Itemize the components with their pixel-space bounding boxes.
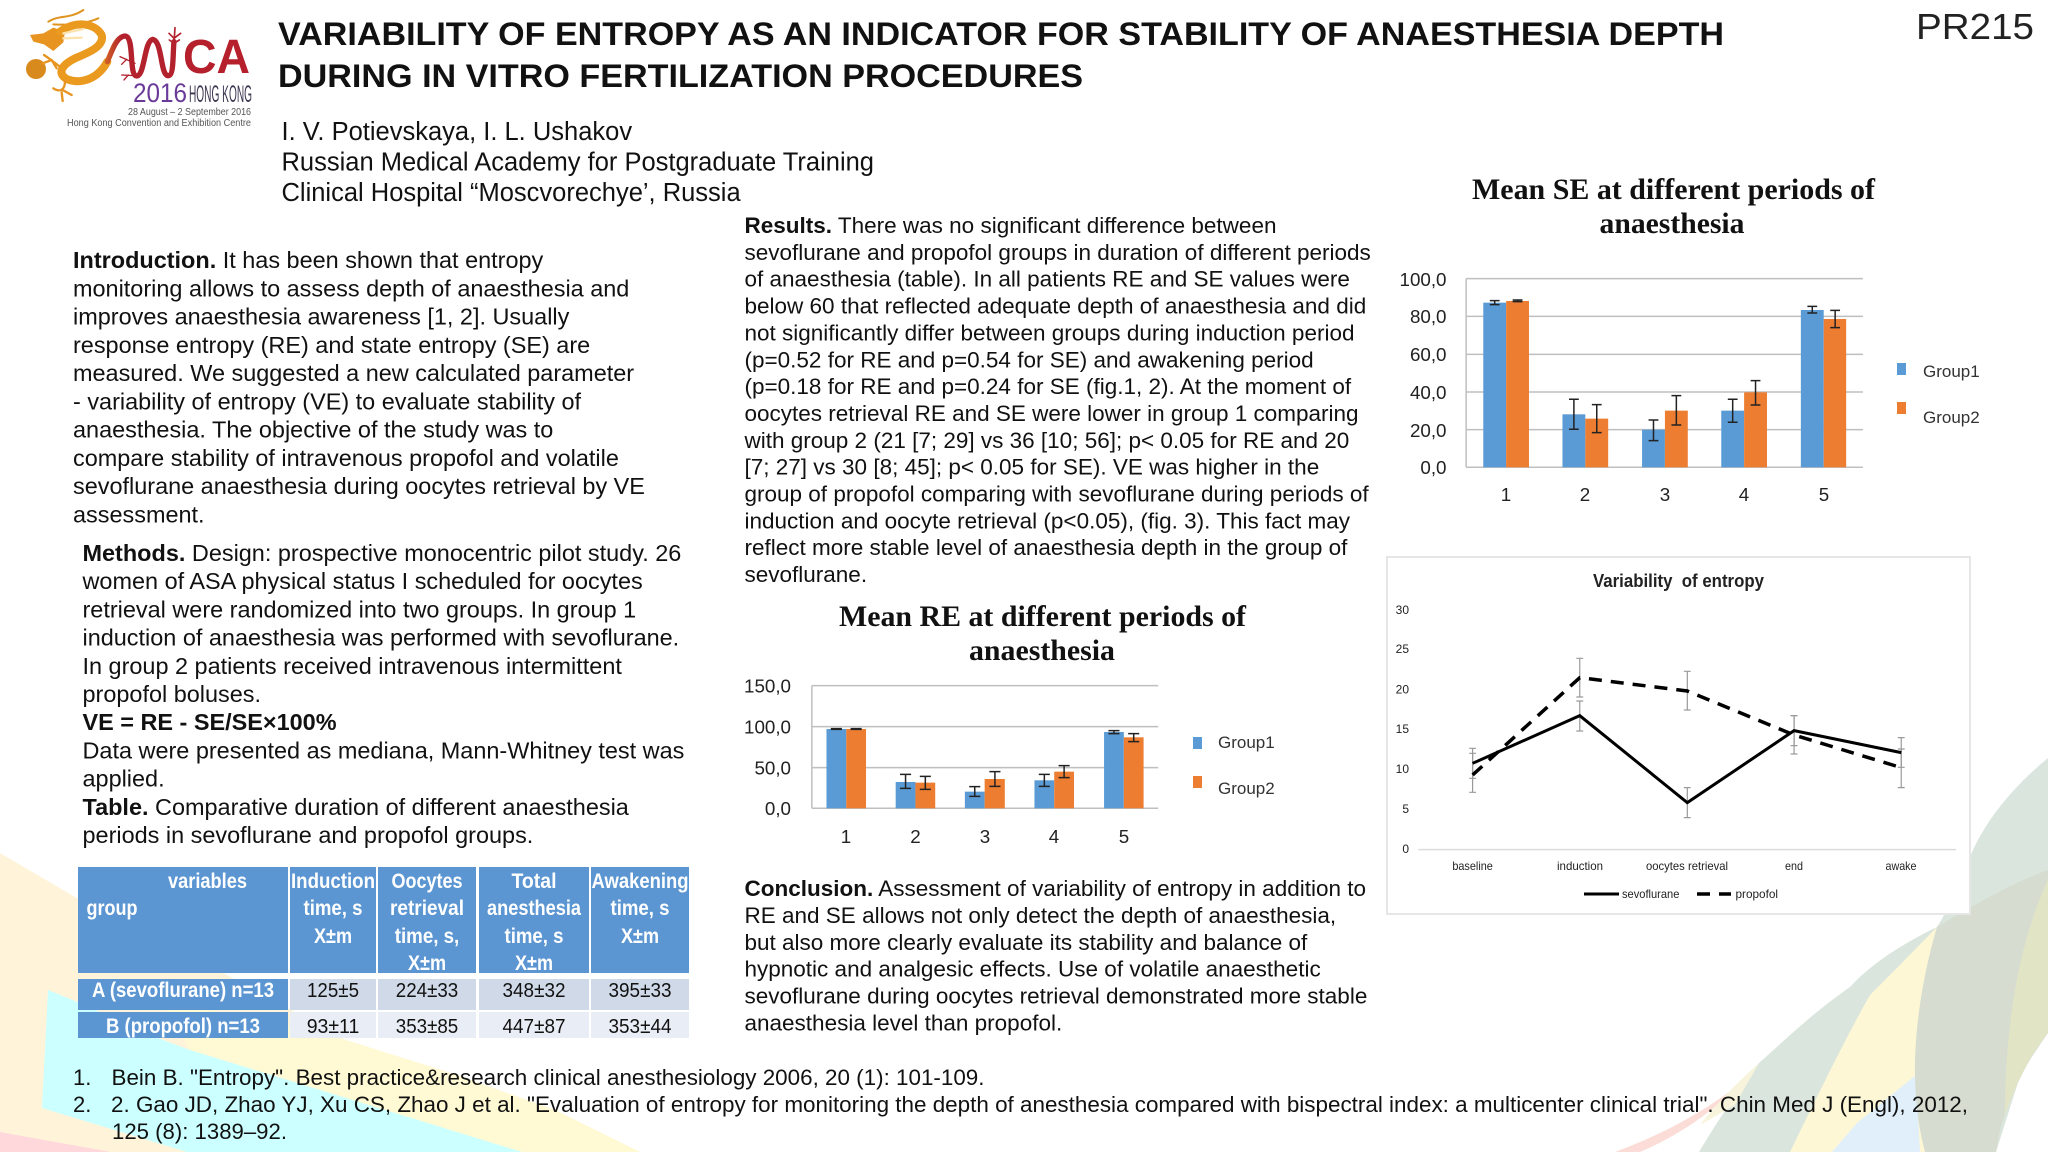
text block: results: oocytes retrieval RE and SE were lower in group 1 comparing [744, 401, 1359, 426]
text block: methods: applied. [82, 766, 165, 792]
text block: results [744, 213, 1371, 587]
y axis labels: 100,0 [1400, 269, 1446, 290]
table row A [78, 979, 689, 1010]
logo year: 2016 [133, 78, 187, 108]
title: VARIABILITY OF ENTROPY AS AN INDICATOR FOR STABILITY OF ANAESTHESIA DEPTH [278, 16, 1724, 52]
x axis labels: end [1785, 859, 1803, 873]
text block: results: of anaesthesia (table). In all patients RE and SE values were [744, 267, 1350, 292]
chart: mean SE bar chart [1400, 173, 1980, 505]
chart title: Variability of entropy [1593, 571, 1764, 591]
text block: results: [7; 27] vs 30 [8; 45]; p< 0.05 for SE). VE was higher in the [744, 455, 1319, 480]
text block: conclusion: sevoflurane during oocytes retrieval demonstrated more stable [744, 984, 1367, 1009]
table row A: A (sevoflurane) n=13 [92, 979, 274, 1002]
chart frame [1387, 557, 1970, 914]
table row B: 353±44 [608, 1016, 672, 1038]
table row A: 348±32 [502, 980, 566, 1002]
text block: introduction: sevoflurane anaesthesia during oocytes retrieval by VE [73, 473, 645, 499]
legend: Group1 [1923, 362, 1980, 381]
text block: results: (p=0.18 for RE and p=0.24 for SE (fig.1, 2). At the moment of [744, 374, 1352, 399]
authors and affiliations: I. V. Potievskaya, I. L. Ushakov [282, 118, 632, 146]
table header row: Oocytes [392, 870, 462, 893]
table header row: Awakening [592, 870, 688, 893]
text block: introduction: Introduction. It has been shown that entropy [73, 247, 544, 273]
table row B [78, 1012, 689, 1038]
text block: introduction: monitoring allows to assess depth of anaesthesia and [73, 275, 629, 301]
text block: conclusion: anaesthesia level than propofol. [744, 1010, 1062, 1036]
text block: methods: Table. Comparative duration of different anaesthesia [82, 794, 630, 820]
table header row: group [86, 897, 138, 920]
text block: conclusion: hypnotic and analgesic effects. Use of volatile anaesthetic [744, 957, 1321, 982]
x axis labels: 3 [1660, 484, 1670, 505]
plot bars and error bars [1466, 279, 1863, 467]
text block: introduction: compare stability of intravenous propofol and volatile [73, 445, 619, 471]
text block: methods: induction of anaesthesia was performed with sevoflurane. [82, 625, 679, 651]
text block: conclusion: but also more clearly evaluate its stability and balance of [744, 930, 1308, 955]
y axis labels: 60,0 [1410, 344, 1446, 365]
y axis labels: 40,0 [1410, 382, 1446, 403]
x axis labels [1452, 859, 1917, 873]
table header row: time, s, [395, 925, 459, 948]
authors and affiliations: Russian Medical Academy for Postgraduate Training [282, 148, 874, 176]
table header row: X±m [314, 925, 352, 948]
table row B: 353±85 [396, 1016, 458, 1038]
y axis labels: 150,0 [744, 676, 791, 696]
table header row: retrieval [390, 897, 464, 920]
text block: results: reflect more stable level of anaesthesia depth in the group of [744, 535, 1348, 560]
table header row: Total [512, 870, 556, 893]
y axis labels: 20,0 [1410, 420, 1446, 441]
icon: golden dragon [26, 10, 181, 101]
plot bars and error bars [812, 686, 1158, 808]
table row B: B (propofol) n=13 [106, 1015, 260, 1038]
y axis labels: 20 [1396, 682, 1409, 696]
table row B: 93±11 [307, 1016, 359, 1038]
table header row: X±m [515, 952, 553, 975]
chart title: anaesthesia [1600, 207, 1744, 240]
y axis labels [1400, 269, 1446, 478]
title: DURING IN VITRO FERTILIZATION PROCEDURES [278, 58, 1083, 94]
x axis labels: awake [1886, 859, 1917, 873]
y axis labels: 15 [1396, 722, 1409, 736]
legend [1584, 887, 1778, 901]
x axis labels: induction [1557, 859, 1603, 873]
text block: introduction: - variability of entropy (VE) to evaluate stability of [73, 388, 582, 414]
y axis labels: 100,0 [744, 716, 791, 738]
legend: Group1 [1218, 733, 1275, 752]
text block: results: group of propofol comparing with sevoflurane during periods of [744, 482, 1369, 506]
chart title [839, 600, 1247, 667]
y axis labels: 30 [1396, 603, 1409, 617]
text block: methods: retrieval were randomized into two groups. In group 1 [82, 596, 636, 622]
conference logo [26, 10, 252, 129]
legend [1193, 733, 1275, 798]
x axis labels: 5 [1119, 826, 1129, 847]
text block: methods: Methods. Design: prospective monocentric pilot study. 26 [82, 540, 681, 566]
background: bottom-left coloured ribbons [0, 853, 640, 1152]
text block: introduction [73, 247, 645, 527]
references: 125 (8): 1389–92. [112, 1119, 287, 1144]
logo dates: 28 August – 2 September 2016 [128, 107, 251, 118]
authors and affiliations: Clinical Hospital “Moscvorechye’, Russia [282, 179, 741, 207]
text block: methods: propofol boluses. [82, 681, 261, 707]
text block: conclusion [744, 876, 1367, 1036]
text block: introduction: response entropy (RE) and state entropy (SE) are [73, 332, 590, 358]
text block: methods: periods in sevoflurane and propofol groups. [82, 822, 533, 848]
chart title [1472, 173, 1876, 240]
y axis labels: 0,0 [765, 798, 791, 819]
table row A: 125±5 [307, 980, 359, 1002]
logo venue: Hong Kong Convention and Exhibition Centre [67, 118, 251, 129]
legend [1897, 362, 1980, 427]
text block: introduction: improves anaesthesia awareness [1, 2]. Usually [73, 304, 570, 330]
x axis labels: 5 [1819, 484, 1829, 505]
poster code: PR215 [1916, 6, 2034, 47]
table header row: time, s [504, 925, 564, 948]
chart title: anaesthesia [969, 634, 1115, 667]
line: propofol [1473, 678, 1901, 775]
authors and affiliations [282, 118, 874, 207]
table row A: 224±33 [396, 980, 458, 1002]
text block: methods [82, 540, 684, 848]
chart title: Mean RE at different periods of [839, 600, 1247, 633]
table header row: anesthesia [487, 897, 581, 920]
references: Bein B. "Entropy". Best practice&research clinical anesthesiology 2006, 20 (1): 101-109. [112, 1065, 984, 1090]
x axis labels: oocytes retrieval [1646, 859, 1728, 873]
text block: results: Results. There was no significant difference between [744, 213, 1276, 238]
text block: methods: Data were presented as mediana, Mann-Whitney test was [82, 737, 684, 763]
text block: results: sevoflurane and propofol groups in duration of different periods [744, 240, 1371, 265]
table: comparative duration [78, 867, 689, 1038]
table header row: time, s [304, 897, 362, 920]
table header row: Induction [291, 870, 375, 893]
y axis labels: 50,0 [754, 758, 791, 778]
legend: sevoflurane [1622, 887, 1680, 901]
text block: results: below 60 that reflected adequate depth of anaesthesia and did [744, 294, 1366, 319]
x axis labels: 4 [1739, 484, 1749, 505]
text block: introduction: anaesthesia. The objective of the study was to [73, 416, 553, 442]
table row B: 447±87 [502, 1016, 566, 1038]
x axis labels: 3 [980, 826, 990, 847]
table header row: X±m [621, 925, 659, 948]
plot lines and error bars [1418, 658, 1956, 850]
references: 2. [73, 1092, 91, 1117]
chart: mean RE bar chart [744, 600, 1275, 847]
y axis labels: 25 [1396, 642, 1409, 656]
text block: results: induction and oocyte retrieval (p<0.05), (fig. 3). This fact may [744, 508, 1351, 533]
x axis labels: baseline [1452, 859, 1493, 873]
text block: introduction: assessment. [73, 501, 205, 527]
legend: Group2 [1218, 779, 1275, 798]
y axis labels [744, 676, 791, 819]
y axis labels: 0,0 [1420, 457, 1446, 478]
text block: methods: women of ASA physical status I scheduled for oocytes [82, 568, 643, 594]
text block: introduction: measured. We suggested a new calculated parameter [73, 360, 634, 386]
text block: results: with group 2 (21 [7; 29] vs 36 [10; 56]; p< 0.05 for RE and 20 [744, 428, 1349, 453]
y axis labels [1396, 603, 1409, 856]
text block: results: not significantly differ between groups during induction period [744, 320, 1354, 345]
x axis labels: 1 [841, 826, 851, 847]
x axis labels [1501, 484, 1829, 505]
legend: Group2 [1923, 408, 1980, 427]
references: 2. Gao JD, Zhao YJ, Xu CS, Zhao J et al. "Evaluation of entropy for monitoring the depth of anesthesia compared with bispectral index: a multicenter clinical trial". Chin Med J (Engl), 2012, [111, 1092, 1968, 1117]
legend: propofol [1736, 887, 1778, 901]
table header row: time, s [610, 897, 670, 920]
table header row: X±m [408, 952, 446, 975]
x axis labels: 2 [1580, 484, 1590, 505]
title [278, 16, 1724, 94]
x axis labels: 1 [1501, 484, 1511, 505]
text block: results: sevoflurane. [744, 562, 867, 587]
table header row: variables [168, 870, 247, 893]
y axis labels: 80,0 [1410, 306, 1446, 327]
text block: methods: In group 2 patients received intravenous intermittent [82, 653, 622, 679]
text block: conclusion: Conclusion. Assessment of variability of entropy in addition to [744, 876, 1366, 901]
text block: results: (p=0.52 for RE and p=0.54 for SE) and awakening period [744, 347, 1314, 372]
table header row [78, 867, 689, 975]
chart title: Mean SE at different periods of [1472, 173, 1876, 206]
background: bottom-right coloured ribbons [1615, 758, 2048, 1152]
text block: methods: VE = RE - SE/SE×100% [82, 709, 337, 735]
y axis labels: 10 [1396, 762, 1409, 776]
table row A: 395±33 [608, 980, 672, 1002]
y axis labels: 0 [1402, 842, 1409, 856]
chart: variability of entropy line chart [1387, 557, 1970, 914]
y axis labels: 5 [1402, 802, 1409, 816]
text block: conclusion: RE and SE allows not only detect the depth of anaesthesia, [744, 903, 1336, 928]
line: sevoflurane [1473, 716, 1901, 803]
x axis labels: 4 [1049, 826, 1059, 847]
x axis labels: 2 [910, 826, 921, 847]
x axis labels [841, 826, 1129, 847]
references: 1. [73, 1065, 91, 1090]
text: HONG KONG [189, 81, 252, 108]
logo letters CA: CA [183, 31, 250, 84]
references [73, 1065, 1968, 1144]
